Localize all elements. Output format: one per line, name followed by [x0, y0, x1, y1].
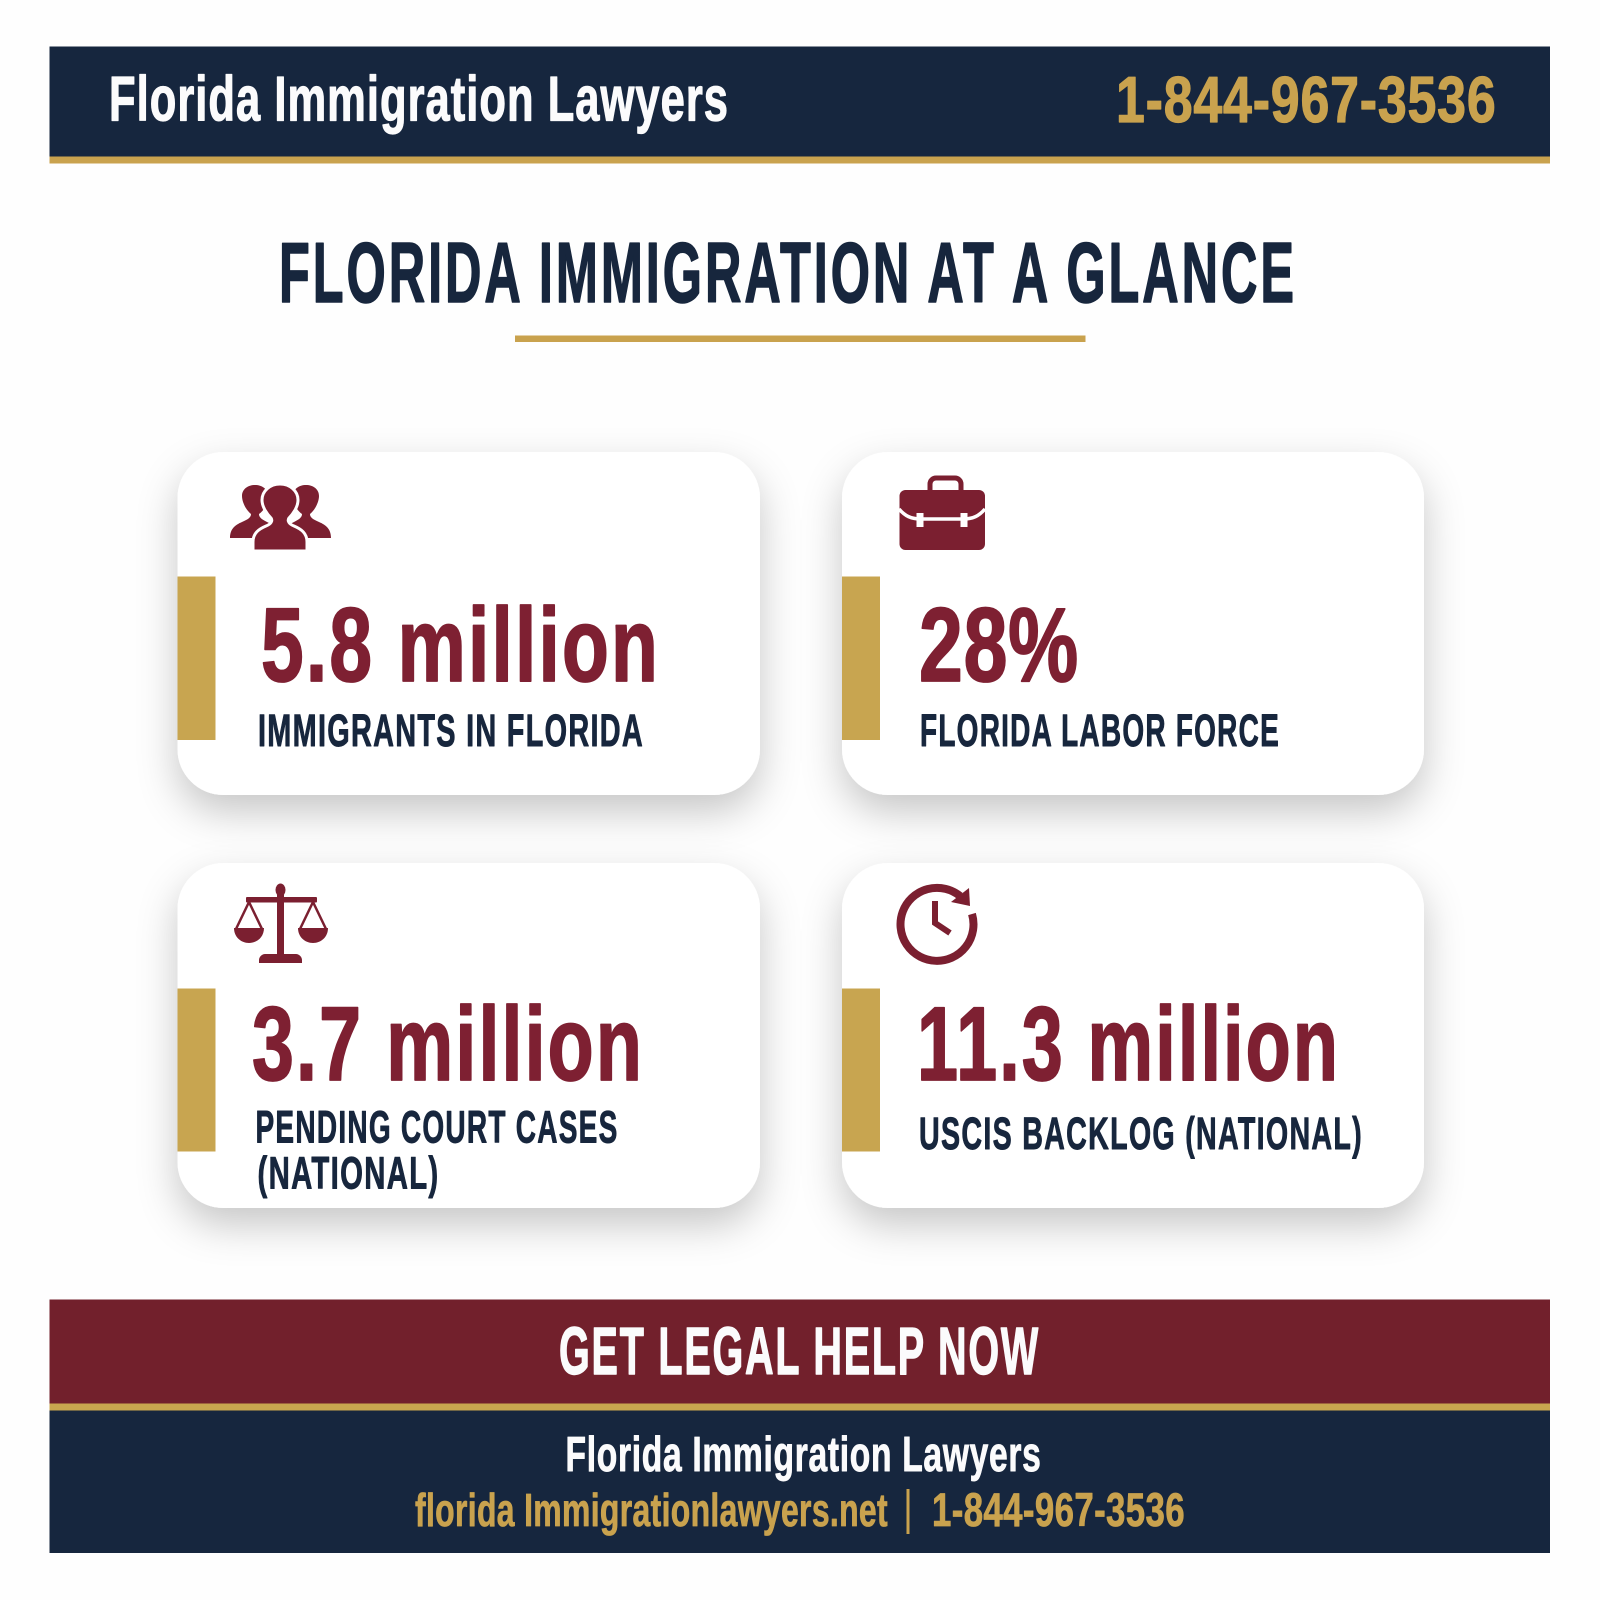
icon: clock with arrow: [900, 888, 973, 961]
icon: scales of justice: [234, 884, 328, 963]
website: florida Immigrationlawyers.net: [415, 1484, 888, 1536]
panel: Florida labor force: [842, 452, 1424, 795]
stat label: [256, 1102, 618, 1198]
gold accent bar: [178, 988, 216, 1152]
header bar: [50, 46, 1550, 164]
call to action banner: [50, 1300, 1550, 1410]
stat label: IMMIGRANTS IN FLORIDA: [258, 705, 644, 756]
call to action banner: GET LEGAL HELP NOW: [559, 1314, 1040, 1389]
icon: briefcase: [899, 478, 985, 550]
footer firm name: Florida Immigration Lawyers: [566, 1428, 1042, 1482]
stat label: USCIS BACKLOG (NATIONAL): [919, 1108, 1363, 1159]
panel: USCIS backlog: [842, 863, 1424, 1208]
stat label: PENDING COURT CASES: [256, 1102, 618, 1152]
panel: immigrants in Florida: [178, 452, 760, 795]
stat label: (NATIONAL): [258, 1148, 440, 1198]
firm name: Florida Immigration Lawyers: [109, 64, 729, 134]
stat value: 11.3 million: [917, 986, 1340, 1103]
title underline: [515, 336, 1086, 342]
phone number: 1-844-967-3536: [1116, 63, 1496, 136]
stat label: FLORIDA LABOR FORCE: [920, 705, 1280, 756]
stat value: 5.8 million: [261, 587, 660, 704]
separator: [906, 1489, 910, 1534]
footer bar: [50, 1410, 1550, 1553]
icon: people: [230, 484, 331, 551]
title: [279, 226, 1297, 342]
footer phone: 1-844-967-3536: [932, 1483, 1185, 1536]
stat value: 28%: [919, 587, 1079, 704]
stat value: 3.7 million: [252, 986, 644, 1103]
gold accent bar: [842, 576, 880, 740]
panel: pending court cases: [178, 863, 760, 1208]
gold accent bar: [178, 576, 216, 740]
gold accent bar: [842, 988, 880, 1152]
